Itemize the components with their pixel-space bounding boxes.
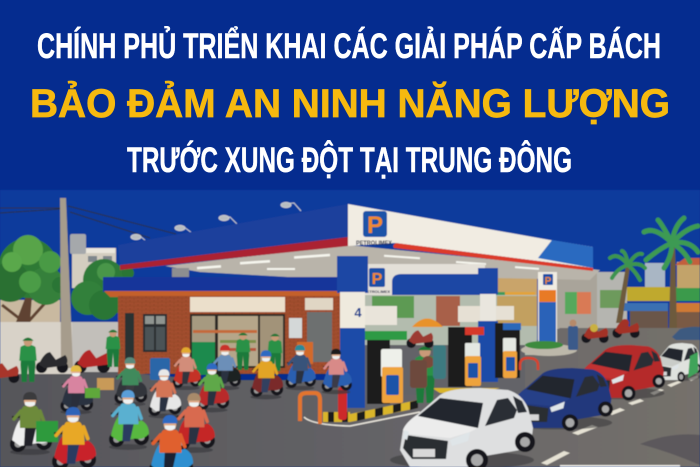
view behind canopy	[172, 268, 189, 277]
store side window	[143, 314, 167, 352]
sign totem: P	[545, 276, 552, 287]
pump 3	[495, 323, 521, 378]
customers at pumps	[406, 330, 446, 388]
shop front	[190, 314, 285, 368]
canopy lights	[197, 254, 539, 270]
navy car	[506, 368, 613, 431]
pump island curbs	[304, 388, 500, 426]
blue barrel	[150, 358, 170, 380]
pillar middle	[478, 268, 498, 382]
far blue car	[672, 327, 700, 340]
attendant at pump	[414, 346, 436, 403]
store roof band	[103, 277, 340, 292]
canopy lamps	[131, 202, 301, 241]
motorbike queue	[10, 345, 352, 467]
store brick wall	[118, 296, 340, 374]
header band	[0, 0, 700, 190]
canopy red stripe right	[393, 243, 593, 271]
white car	[390, 388, 535, 467]
upper beam with blue arch	[365, 264, 485, 295]
road lane markings	[541, 375, 698, 465]
main pillar with number 4	[337, 256, 368, 408]
sign: Petrolimex logo on beam	[364, 268, 390, 294]
canopy fascia: white right	[348, 204, 593, 268]
pump 2	[448, 327, 484, 387]
shop sign	[190, 297, 285, 312]
sky	[0, 190, 700, 340]
distant buildings	[497, 258, 700, 330]
fire extinguisher	[338, 387, 347, 420]
red bollard at island	[520, 358, 538, 370]
left trees	[0, 235, 134, 322]
sign: Petrolimex logo on beam: PETROLIMEX	[364, 289, 390, 294]
store side door	[125, 313, 134, 361]
canopy underside	[165, 245, 600, 280]
canopy fascia: blue left	[118, 204, 348, 265]
sign totem	[521, 272, 577, 356]
right sign and door	[289, 298, 333, 364]
road tree shadow	[640, 434, 700, 465]
canopy red stripe left	[120, 237, 348, 270]
bottom edge trace	[560, 465, 680, 467]
palm trees	[610, 218, 698, 330]
Petrolimex logo on canopy	[356, 211, 393, 247]
boundary wall	[0, 322, 118, 374]
utility pole and wires	[0, 198, 176, 368]
Petrolimex logo on canopy: P	[367, 212, 383, 239]
convenience store	[103, 277, 340, 380]
illustration: petrol station scene	[0, 190, 700, 467]
title line 2: BẢO ĐẢM AN NINH NĂNG LƯỢNG	[30, 80, 670, 126]
store orange trim	[104, 291, 340, 297]
pump bay backdrop	[365, 295, 537, 395]
red car	[574, 345, 665, 401]
orange barrier	[300, 393, 320, 424]
sign: Petrolimex logo on beam: P	[372, 271, 383, 288]
staff and parked bikes	[0, 330, 282, 383]
main pillar with number 4: 4	[354, 305, 362, 320]
canopy blue tip	[538, 240, 593, 268]
drinks fridge	[192, 342, 215, 375]
Petrolimex logo on canopy: PETROLIMEX	[356, 240, 393, 247]
white-green car	[652, 343, 700, 382]
pump 1	[365, 331, 407, 404]
background house	[0, 248, 116, 324]
ground and road	[0, 328, 700, 467]
people on the sidewalk	[568, 319, 640, 350]
